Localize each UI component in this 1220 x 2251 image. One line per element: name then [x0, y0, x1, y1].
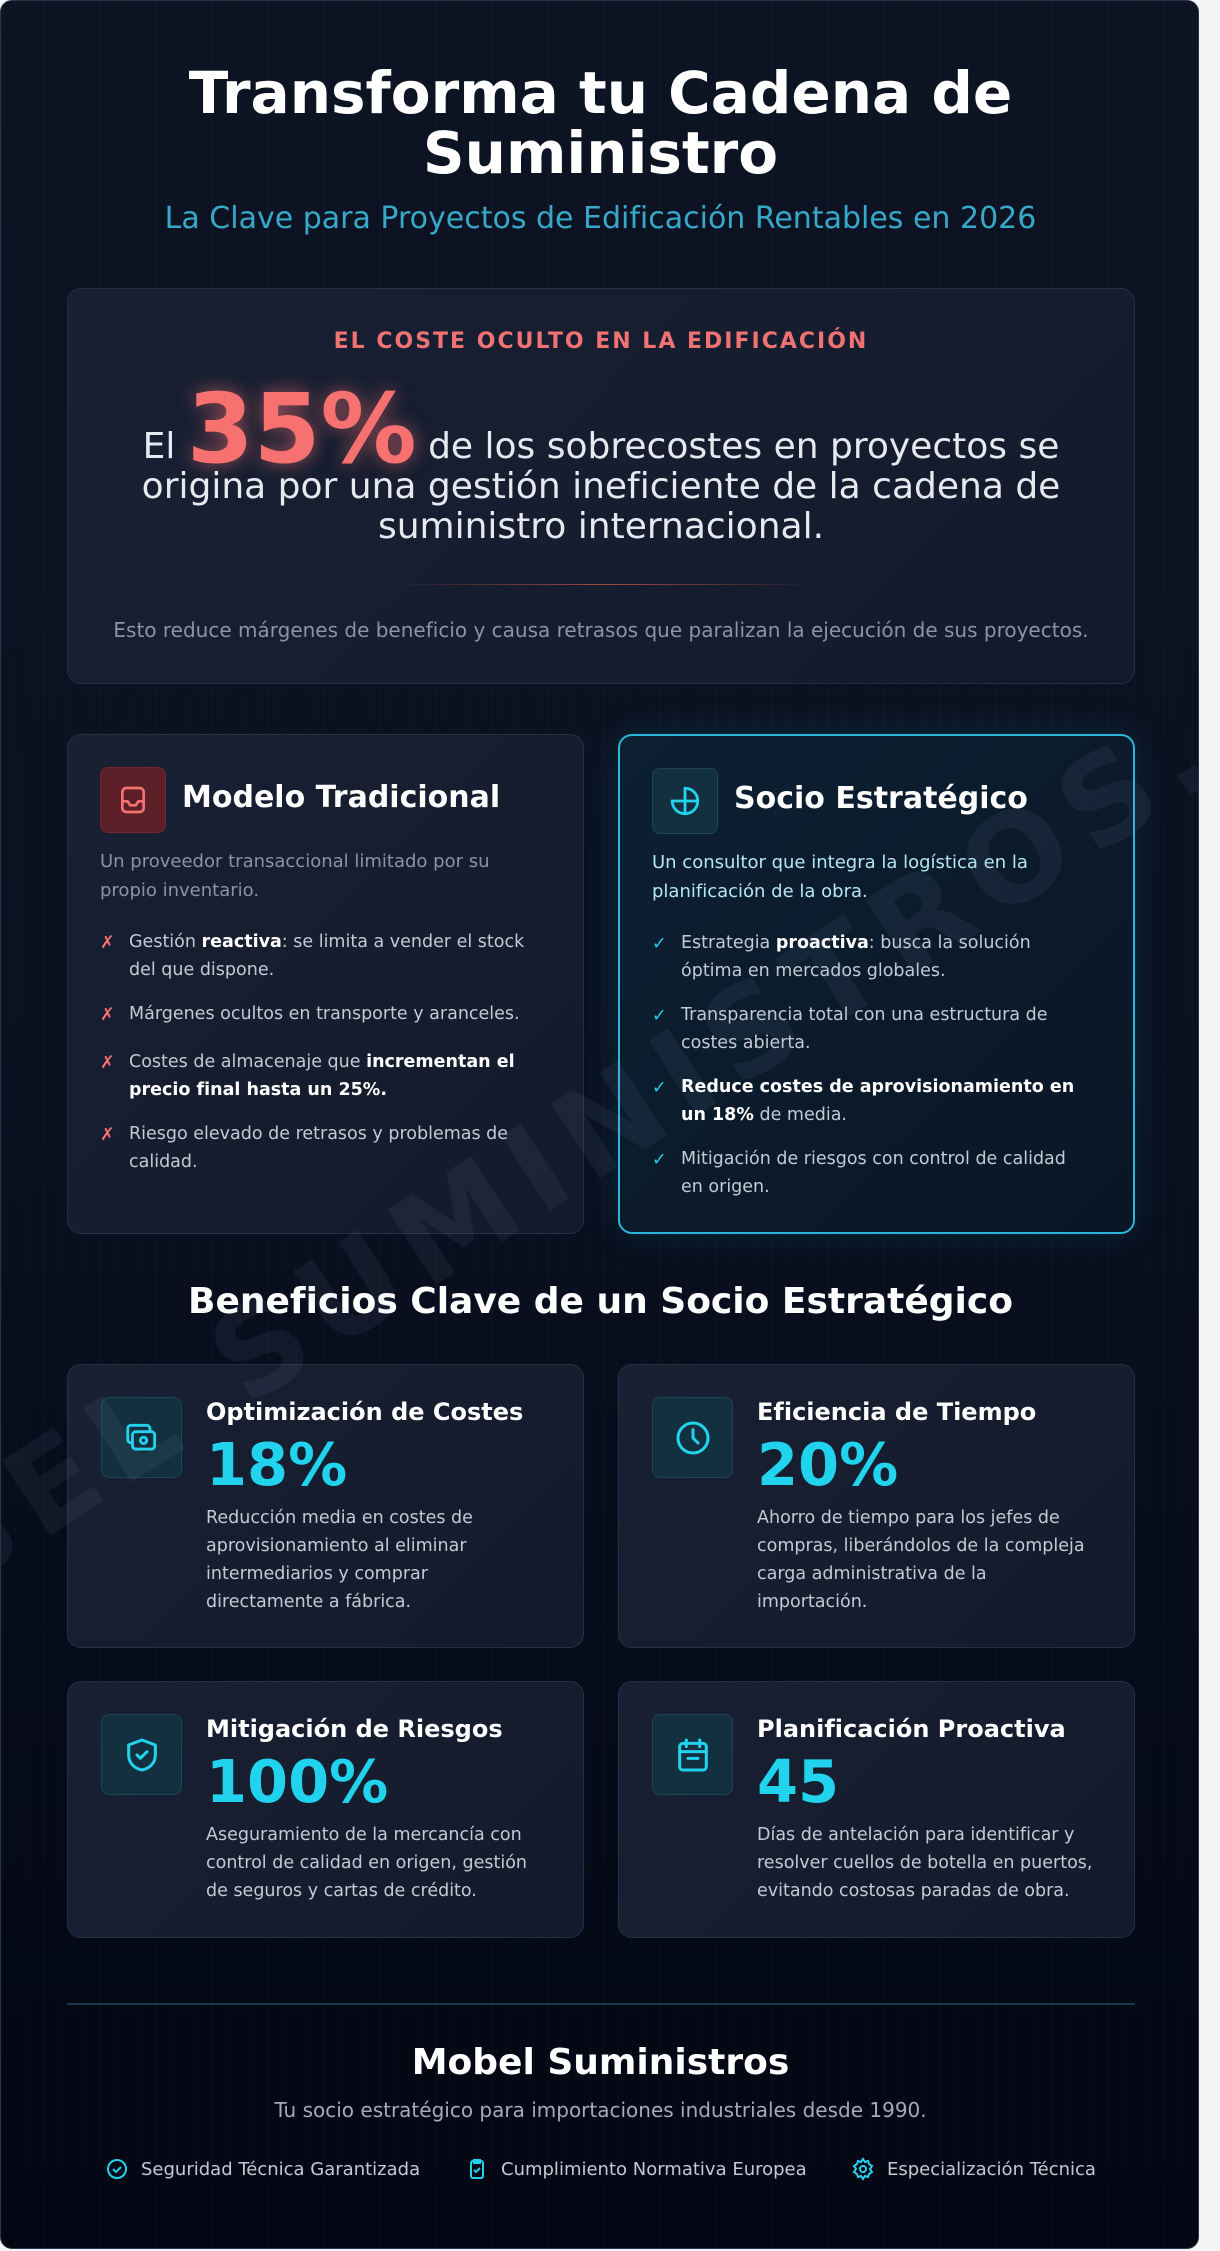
- icon: shield: [101, 1714, 182, 1795]
- panel: strategic partner: [618, 734, 1135, 1234]
- list: advantages: ✓: [652, 934, 667, 954]
- list: drawbacks: ✗: [100, 1005, 115, 1025]
- panel: cost optimization: Optimización de Costes: [206, 1398, 523, 1426]
- list: advantages: ✓: [652, 1078, 667, 1098]
- list: advantages: ✓: [652, 1006, 667, 1026]
- title: Suministro: [423, 119, 778, 187]
- list: drawbacks: Costes de almacenaje que incrementan el precio final hasta un 25%.: [129, 1052, 515, 1100]
- panel: hidden cost: [67, 288, 1135, 684]
- footer: badges: [107, 2157, 1096, 2181]
- statistic text: El 35% de los sobrecostes en proyectos se origina por una gestión ineficiente de la cadena de suministro internacional.: [142, 373, 1060, 547]
- list: drawbacks: Márgenes ocultos en transporte y aranceles.: [129, 1004, 520, 1024]
- panel: time efficiency: Eficiencia de Tiempo: [757, 1398, 1036, 1426]
- title: [189, 59, 1012, 187]
- badge: seguridad: Seguridad Técnica Garantizada: [141, 2159, 420, 2180]
- description: Un proveedor transaccional limitado por su propio inventario.: [100, 851, 490, 901]
- panel: time efficiency: 20%: [757, 1430, 898, 1499]
- heading: strategic: Socio Estratégico: [734, 781, 1028, 816]
- panel: cost optimization: [67, 1364, 584, 1648]
- icon: inbox: [100, 767, 166, 833]
- heading: benefits: Beneficios Clave de un Socio Estratégico: [188, 1281, 1013, 1322]
- list: drawbacks: ✗: [100, 933, 115, 953]
- panel: risk mitigation: Mitigación de Riesgos: [206, 1715, 503, 1743]
- heading: traditional: Modelo Tradicional: [182, 780, 500, 815]
- panel: cost optimization: Reducción media en costes de aprovisionamiento al eliminar intermediarios y comprar directamente a fábrica.: [206, 1508, 473, 1612]
- list: advantages: ✓: [652, 1150, 667, 1170]
- panel: cost optimization: 18%: [206, 1430, 347, 1499]
- list: advantages: [652, 933, 1074, 1197]
- footer: tagline: Tu socio estratégico para importaciones industriales desde 1990.: [274, 2098, 927, 2122]
- panel: proactive planning: [618, 1681, 1135, 1938]
- panel: risk mitigation: [67, 1681, 584, 1938]
- panel: time efficiency: [618, 1364, 1135, 1648]
- subtitle: La Clave para Proyectos de Edificación Rentables en 2026: [165, 201, 1036, 236]
- list: drawbacks: ✗: [100, 1053, 115, 1073]
- panel: proactive planning: Días de antelación para identificar y resolver cuellos de botella en puertos, evitando costosas paradas de obra.: [757, 1825, 1092, 1901]
- title: Transforma tu Cadena de: [189, 59, 1012, 127]
- icon: clock: [652, 1397, 733, 1478]
- icon: money: [101, 1397, 182, 1478]
- list: advantages: Estrategia proactiva: busca la solución óptima en mercados globales.: [681, 933, 1031, 981]
- list: advantages: Reduce costes de aprovisionamiento en un 18% de media.: [681, 1077, 1074, 1125]
- panel: time efficiency: Ahorro de tiempo para los jefes de compras, liberándolos de la compleja carga administrativa de la importación.: [757, 1508, 1085, 1612]
- list: drawbacks: Gestión reactiva: se limita a vender el stock del que dispone.: [129, 932, 524, 980]
- panel: risk mitigation: 100%: [206, 1747, 388, 1816]
- icon: calendar: [652, 1714, 733, 1795]
- panel: risk mitigation: Aseguramiento de la mercancía con control de calidad en origen, gestión de seguros y cartas de crédito.: [206, 1825, 527, 1901]
- badge: especializacion: Especialización Técnica: [887, 2159, 1096, 2180]
- list: drawbacks: [100, 932, 524, 1172]
- heading: hidden cost: EL COSTE OCULTO EN LA EDIFICACIÓN: [334, 329, 868, 354]
- list: advantages: Transparencia total con una estructura de costes abierta.: [681, 1005, 1048, 1053]
- list: drawbacks: Riesgo elevado de retrasos y problemas de calidad.: [129, 1124, 508, 1172]
- list: drawbacks: ✗: [100, 1125, 115, 1145]
- footer: brand: Mobel Suministros: [412, 2042, 789, 2083]
- footnote: Esto reduce márgenes de beneficio y causa retrasos que paralizan la ejecución de sus proyectos.: [113, 618, 1089, 642]
- panel: traditional model: [67, 734, 584, 1234]
- panel: proactive planning: Planificación Proactiva: [757, 1715, 1066, 1743]
- description: Un consultor que integra la logística en la planificación de la obra.: [652, 852, 1028, 902]
- badge: normativa: Cumplimiento Normativa Europea: [501, 2159, 807, 2180]
- list: advantages: Mitigación de riesgos con control de calidad en origen.: [681, 1149, 1066, 1197]
- icon: pie: [652, 768, 718, 834]
- panel: proactive planning: 45: [757, 1747, 839, 1816]
